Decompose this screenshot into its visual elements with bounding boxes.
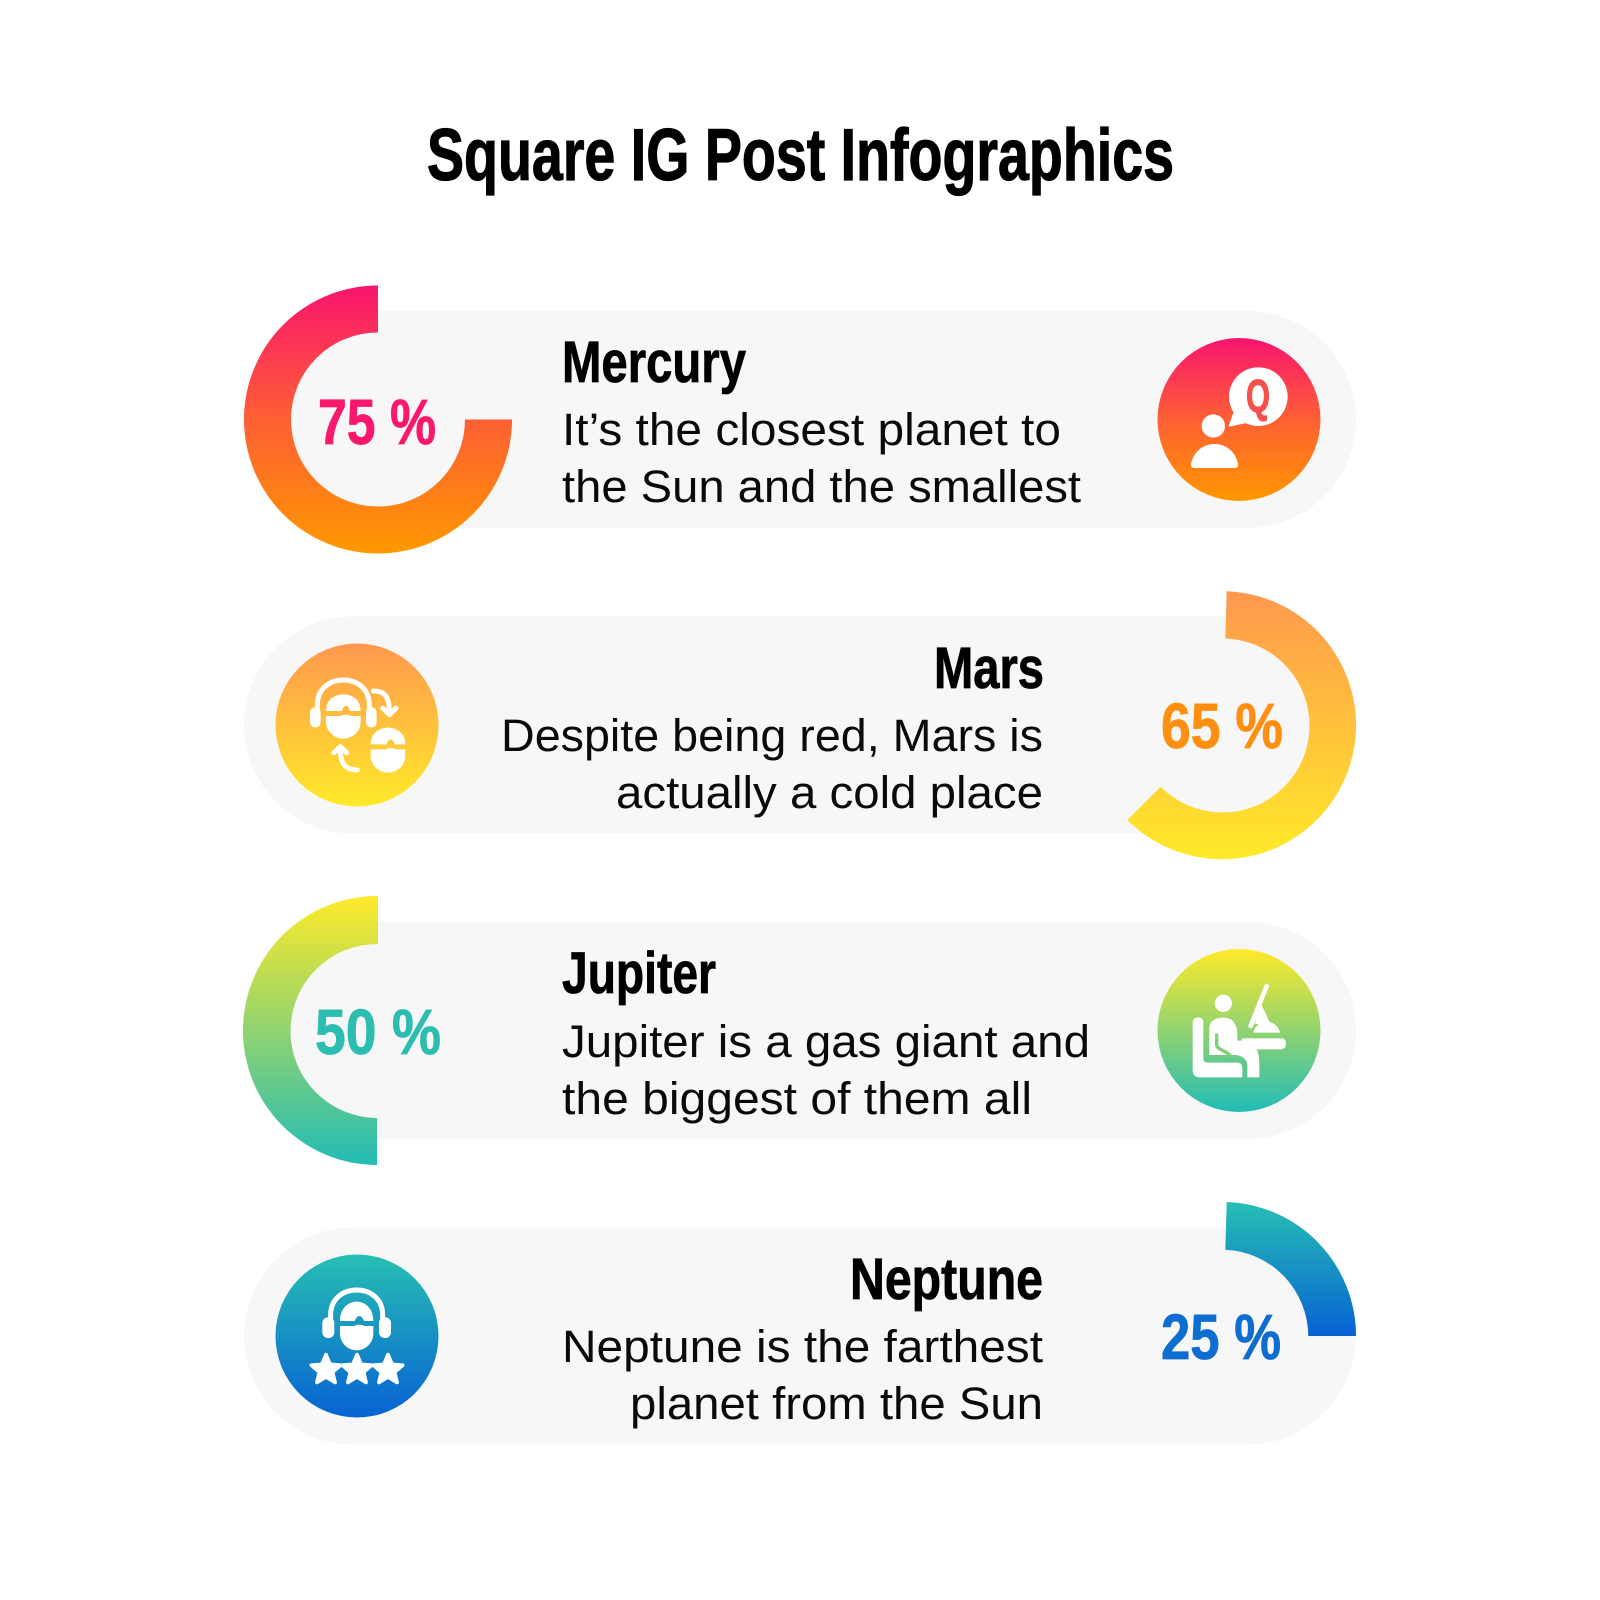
- description: Neptune: Neptune is the farthest: [562, 1321, 1043, 1372]
- donut chart: Mercury 75%: [244, 286, 512, 554]
- description: Mars: Despite being red, Mars is: [501, 710, 1043, 761]
- icon: person asking question: Q: [1246, 370, 1270, 422]
- icon: person asking question: [1158, 338, 1320, 501]
- percentage: 65%: 65 %: [1161, 690, 1283, 762]
- description: Jupiter: the biggest of them all: [562, 1073, 1032, 1124]
- panel background: Jupiter: [244, 922, 1356, 1139]
- heading: Jupiter: Jupiter: [562, 941, 716, 1006]
- panel background: Mercury: [244, 311, 1356, 528]
- panel background: Mars: [244, 616, 1356, 834]
- heading: Neptune: Neptune: [850, 1247, 1043, 1312]
- description: Mercury: [562, 404, 1081, 512]
- description: Mercury: the Sun and the smallest: [562, 461, 1081, 512]
- description: Neptune: planet from the Sun: [630, 1378, 1043, 1429]
- donut chart: Mars 65%: [1127, 591, 1356, 859]
- percentage: 50%: 50 %: [315, 996, 441, 1068]
- description: Mercury: It’s the closest planet to: [562, 404, 1061, 455]
- title: Square IG Post Infographics: [427, 115, 1174, 196]
- heading: Mercury: Mercury: [562, 330, 746, 395]
- donut chart: Jupiter 50%: [243, 896, 378, 1165]
- panel: Jupiter: [243, 896, 1356, 1165]
- panel background: Neptune: [244, 1228, 1356, 1444]
- description: Mars: [501, 710, 1043, 818]
- panel: Neptune: [244, 1202, 1356, 1444]
- panel: Mars: [244, 591, 1356, 859]
- description: Jupiter: [562, 1016, 1090, 1124]
- description: Mars: actually a cold place: [616, 767, 1043, 818]
- donut chart: Neptune 25%: [1225, 1202, 1356, 1336]
- icon: support agents swapping: [276, 644, 438, 806]
- panel: Mercury: [244, 286, 1356, 554]
- percentage: 25%: 25 %: [1161, 1301, 1281, 1373]
- percentage: 75%: 75 %: [318, 386, 436, 458]
- icon: agent with three stars: [276, 1254, 438, 1418]
- heading: Mars: Mars: [934, 636, 1044, 701]
- description: Neptune: [562, 1321, 1043, 1429]
- description: Jupiter: Jupiter is a gas giant and: [562, 1016, 1090, 1067]
- icon: person seated at desk: [1158, 949, 1320, 1112]
